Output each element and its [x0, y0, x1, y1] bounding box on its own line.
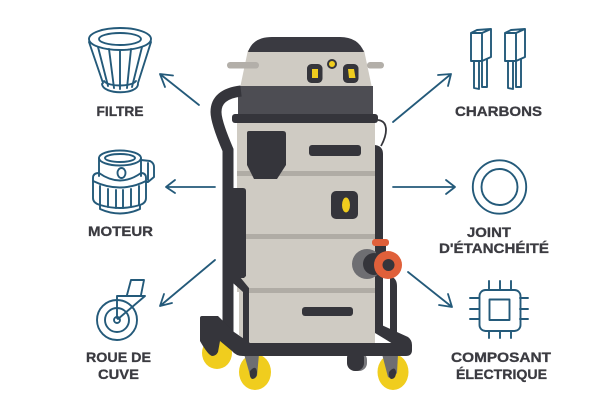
lower left bracket: [233, 277, 249, 344]
front right wheel: [378, 354, 408, 390]
arrow: filtre: [160, 74, 199, 105]
side handles: [227, 62, 384, 68]
label: roue de cuve: ROUE DE: [86, 349, 151, 365]
head shell: [240, 50, 372, 88]
hose connector: [352, 239, 402, 279]
body seams: [237, 171, 375, 293]
icon: joint: [473, 160, 526, 214]
label: moteur: MOTEUR: [88, 223, 153, 239]
arrow: composant: [408, 272, 452, 307]
arrow: roue de cuve: [160, 260, 215, 306]
arrow: moteur: [166, 180, 215, 193]
icon: filtre: [89, 28, 151, 92]
outlet tube: [390, 276, 397, 332]
label: composant électrique: ÉLECTRIQUE: [456, 366, 547, 382]
centre small wheel: [347, 350, 367, 371]
vacuum cleaner illustration: [200, 37, 412, 390]
switch: [331, 191, 358, 219]
front left wheel: [239, 354, 271, 390]
wheel base frame: [200, 316, 412, 356]
hose handle: [216, 91, 241, 335]
upper slot: [309, 145, 361, 156]
label: composant électrique: [451, 349, 551, 382]
dome cap: [248, 37, 364, 52]
motor band: [238, 86, 373, 116]
lower slot: [302, 307, 353, 316]
right tube: [375, 145, 383, 328]
label: joint d'étanchéité: JOINT: [467, 224, 511, 240]
label: composant électrique: COMPOSANT: [451, 349, 551, 365]
label: charbons: CHARBONS: [455, 103, 542, 119]
label: roue de cuve: [86, 349, 151, 382]
side panel: [223, 188, 246, 278]
icon: composant électrique: [470, 281, 528, 338]
rim: [232, 114, 378, 123]
tank body: [237, 120, 375, 344]
cable: [378, 120, 386, 146]
arrow: charbons: [393, 74, 451, 122]
dust hatch: [247, 131, 286, 179]
rear left wheel: [202, 337, 232, 369]
label: filtre: FILTRE: [96, 103, 144, 119]
label: joint d'étanchéité: D'ÉTANCHÉITÉ: [439, 240, 549, 256]
icon: moteur: [93, 150, 154, 214]
label: roue de cuve: CUVE: [98, 366, 139, 382]
icon: roue de cuve: [97, 280, 145, 340]
icon: charbons: [471, 29, 525, 89]
head controls: [307, 59, 358, 83]
arrow: joint: [393, 180, 455, 194]
label: joint d'étanchéité: [439, 224, 549, 256]
